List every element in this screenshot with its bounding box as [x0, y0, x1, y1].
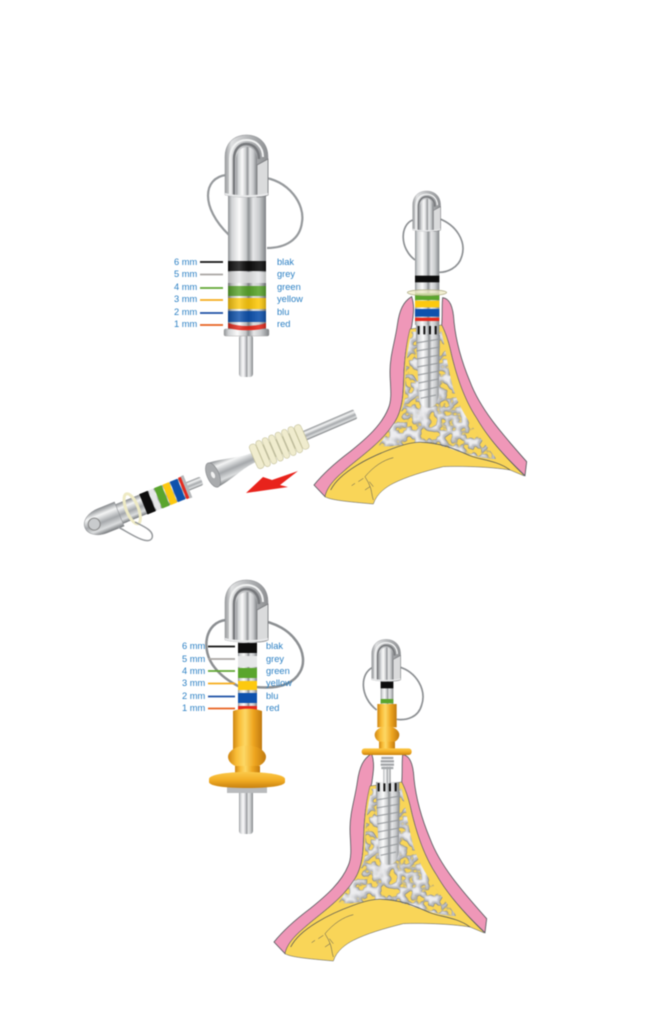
head — [413, 191, 441, 231]
tool 1: depth gauge with colour bands — [208, 135, 302, 377]
millimetre labels, upper: blak — [277, 257, 294, 267]
shaft — [228, 195, 266, 332]
millimetre labels, lower: 5 mm — [182, 654, 205, 664]
stem and thread — [383, 767, 391, 783]
tool 2: gauge with gold abutment — [206, 580, 303, 834]
shaft with bands — [381, 678, 393, 705]
stopper ring — [121, 492, 144, 526]
millimetre labels, lower: 6 mm — [182, 641, 205, 651]
pin — [239, 790, 253, 834]
millimetre labels, upper: green — [277, 282, 301, 292]
icon: handle head — [225, 135, 268, 197]
gold abutment — [209, 709, 285, 793]
wire ring — [118, 522, 152, 541]
millimetre labels, lower — [182, 641, 292, 713]
icon: key ring — [208, 175, 302, 248]
bands — [238, 643, 257, 711]
millimetre labels, upper: 3 mm — [174, 294, 197, 304]
millimetre labels, lower: red — [266, 703, 279, 713]
millimetre labels, lower: green — [266, 666, 290, 676]
millimetre labels, upper: 4 mm — [174, 282, 197, 292]
gold abutment — [362, 704, 412, 755]
millimetre labels, lower: 2 mm — [182, 691, 205, 701]
millimetre labels, lower: blak — [266, 641, 283, 651]
millimetre labels, lower: 1 mm — [182, 703, 205, 713]
millimetre labels, upper — [174, 257, 303, 329]
exploded view: driver with spring — [202, 401, 361, 490]
colour bands — [228, 261, 266, 330]
arrow — [246, 471, 298, 493]
bone cross-section 2 with abutment — [274, 639, 487, 961]
millimetre labels, lower: yellow — [266, 678, 292, 688]
millimetre labels, lower: grey — [266, 654, 284, 664]
bone cross-section 1 with gauge inserted — [314, 191, 527, 504]
millimetre labels, upper: 5 mm — [174, 269, 197, 279]
millimetre labels, upper: red — [277, 319, 290, 329]
face — [202, 461, 224, 489]
pin — [239, 335, 253, 377]
millimetre labels, upper: yellow — [277, 294, 303, 304]
spring — [248, 423, 310, 471]
head — [225, 580, 268, 642]
bands — [139, 475, 192, 515]
bands — [415, 276, 439, 321]
shaft — [238, 640, 257, 712]
exploded view: gauge — [79, 466, 208, 543]
millimetre labels, lower: 3 mm — [182, 678, 205, 688]
millimetre labels, upper: 6 mm — [174, 257, 197, 267]
shaft — [298, 409, 357, 442]
shaft — [93, 477, 190, 533]
cone — [208, 445, 259, 487]
millimetre labels, lower: 4 mm — [182, 666, 205, 676]
silicone stopper — [407, 290, 447, 296]
millimetre labels, upper: 2 mm — [174, 307, 197, 317]
millimetre labels, upper: 1 mm — [174, 319, 197, 329]
millimetre labels, lower: blu — [266, 691, 278, 701]
head — [372, 639, 401, 681]
key ring — [363, 667, 423, 720]
millimetre labels, upper: grey — [277, 269, 295, 279]
head — [80, 502, 124, 540]
key ring — [403, 218, 463, 272]
millimetre labels, upper: blu — [277, 307, 289, 317]
flange — [224, 329, 269, 336]
key ring — [206, 620, 303, 688]
pin — [184, 476, 203, 491]
shaft — [415, 228, 439, 325]
